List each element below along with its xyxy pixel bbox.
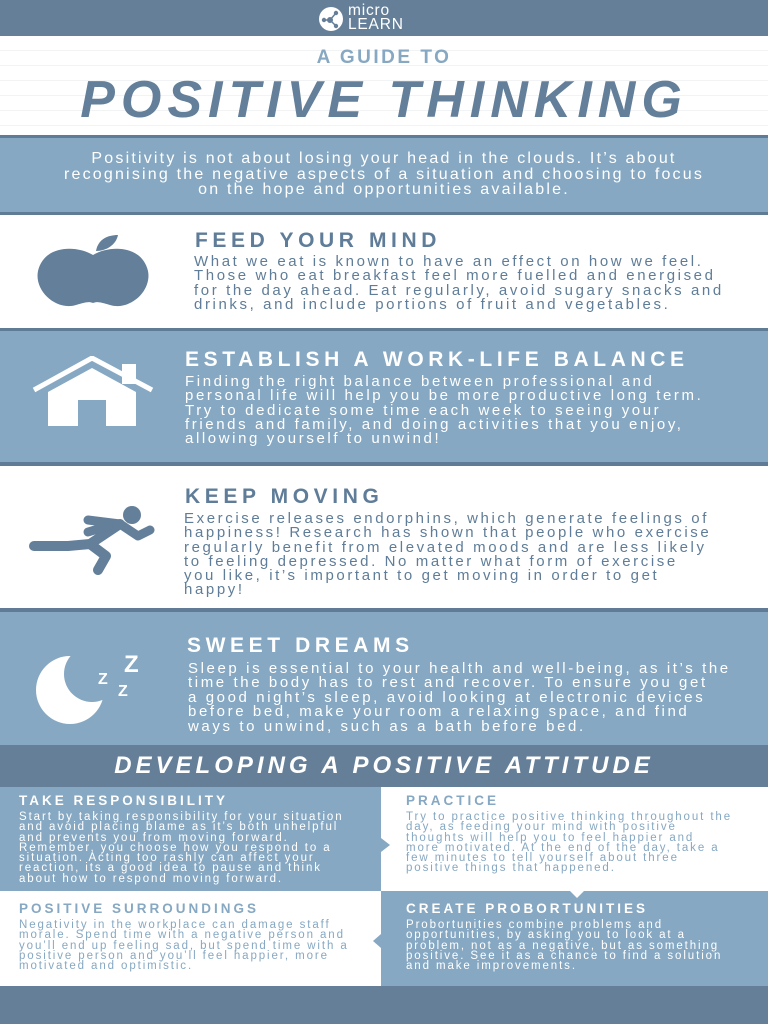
intro panel: Positivity is not about losing your head in the clouds. It’s about (91, 150, 677, 167)
panel: positive surroundings: POSITIVE SURROUNDINGS (19, 901, 259, 916)
intro panel: recognising the negative aspects of a situation and choosing to focus (64, 166, 704, 182)
logo: LEARN (348, 16, 404, 32)
panel: positive surroundings (0, 891, 381, 986)
text: to feeling depressed. No matter what form of exercise (184, 553, 678, 570)
icon: house (32, 356, 154, 426)
panel: positive surroundings: positive person and you’ll feel happier, more (19, 950, 329, 962)
panel: practice: day, as feeding your mind with positive (406, 821, 677, 833)
panel: take responsibility: TAKE RESPONSIBILITY (19, 793, 228, 808)
text: before bed, make your room a relaxing space, and find (188, 703, 689, 720)
intro panel: on the hope and opportunities available. (198, 181, 570, 198)
section header: developing a positive attitude (0, 745, 768, 787)
icon: apple (38, 235, 148, 306)
panel: create probortunities: and make improvements. (406, 960, 577, 972)
panel: practice: PRACTICE (406, 793, 499, 808)
intro panel (0, 138, 768, 212)
text: allowing yourself to unwind! (185, 430, 441, 447)
panel: practice: Try to practice positive thinking throughout the (406, 811, 732, 823)
text: Finding the right balance between professional and (185, 373, 654, 390)
heading: SWEET DREAMS (187, 634, 414, 657)
panel: positive surroundings: Negativity in the workplace can damage staff (19, 919, 331, 931)
text: personal life will help you be more productive long term. (185, 387, 703, 404)
text (188, 660, 731, 735)
icon: moon zzz (36, 651, 139, 724)
text: friends and family, and doing activities that you enjoy, (185, 416, 684, 433)
panel: sweet dreams (0, 612, 768, 745)
heading: FEED YOUR MIND (195, 229, 441, 252)
icon: moon zzz: Z (118, 683, 128, 700)
panel: create probortunities (381, 891, 768, 986)
panel: practice (381, 787, 768, 891)
title: POSITIVE THINKING (80, 71, 688, 129)
text (185, 373, 703, 447)
logo (319, 2, 404, 32)
text (194, 253, 724, 313)
arrows (570, 891, 584, 898)
text: you like, it’s important to get moving in order to get (184, 567, 659, 584)
panel: practice: thoughts will help you to feel happier and (406, 832, 694, 844)
text: regularly benefit from elevated moods and are less likely (184, 539, 707, 556)
panel: create probortunities: positive. See it as a chance to find a solution (406, 950, 722, 962)
text: ways to unwind, such as a bath before bed. (188, 718, 586, 735)
text: Try to dedicate some time each week to seeing your (185, 402, 661, 419)
text: Exercise releases endorphins, which generate feelings of (184, 510, 709, 527)
panel: positive surroundings: motivated and optimistic. (19, 960, 193, 972)
panel: create probortunities: Probortunities combine problems and (406, 919, 663, 931)
panel: practice: more motivated. At the end of the day, take a (406, 842, 720, 854)
panel: positive surroundings: you’ll end up feeling sad, but spend time with a (19, 940, 349, 952)
heading: KEEP MOVING (185, 485, 383, 508)
panel: create probortunities: opportunities, by asking you to look at a (406, 929, 686, 941)
header bar (0, 0, 768, 36)
panel: work-life balance (0, 331, 768, 462)
heading: ESTABLISH A WORK-LIFE BALANCE (185, 348, 689, 371)
panel: take responsibility: about how to respond moving forward. (19, 873, 283, 885)
panel: take responsibility: situation. Acting too rashly can affect your (19, 852, 315, 864)
panel: practice: few minutes to tell yourself about three (406, 852, 679, 864)
panel: keep moving (0, 466, 768, 608)
text: for the day ahead. Eat regularly, avoid sugary snacks and (194, 282, 724, 299)
panel: create probortunities: CREATE PROBORTUNITIES (406, 901, 648, 916)
panel: feed your mind (0, 215, 768, 328)
text: a good night’s sleep, avoid looking at electronic devices (188, 689, 705, 706)
title area (0, 36, 768, 136)
section header: developing a positive attitude: DEVELOPING A POSITIVE ATTITUDE (114, 752, 654, 779)
text: Those who eat breakfast feel more fuelled and energised (194, 267, 716, 284)
panel: create probortunities: problem, not as a negative, but as something (406, 940, 719, 952)
panel: practice: positive things that happened. (406, 862, 616, 874)
panel: take responsibility: and avoid placing blame as it’s both unhelpful (19, 821, 338, 833)
text: Sleep is essential to your health and well-being, as it’s the (188, 660, 731, 677)
panel: take responsibility: reaction, its a good idea to pause and think (19, 862, 322, 874)
text (184, 510, 711, 598)
arrow (381, 838, 390, 852)
text: time the body has to rest and recover. To ensure you get (188, 674, 708, 691)
panel: take responsibility: Start by taking responsibility for your situation (19, 811, 344, 823)
icon: runner (29, 506, 154, 575)
text: What we eat is known to have an effect on how we feel. (194, 253, 704, 270)
footer bar (0, 986, 768, 1024)
subtitle: A GUIDE TO (317, 47, 451, 68)
panel: take responsibility: Remember, you choose how you respond to a (19, 842, 332, 854)
text: happy! (184, 581, 245, 598)
icon: moon zzz: Z (98, 671, 108, 688)
panel: take responsibility (0, 787, 381, 891)
logo: micro (348, 2, 390, 19)
panel: positive surroundings: morale. Spend time with a negative person and (19, 929, 345, 941)
text: drinks, and include portions of fruit and vegetables. (194, 296, 670, 313)
panel: take responsibility: and prevents you from moving forward. (19, 832, 289, 844)
icon: moon zzz: Z (124, 651, 139, 678)
text: happiness! Research has shown that people who exercise (184, 524, 711, 541)
